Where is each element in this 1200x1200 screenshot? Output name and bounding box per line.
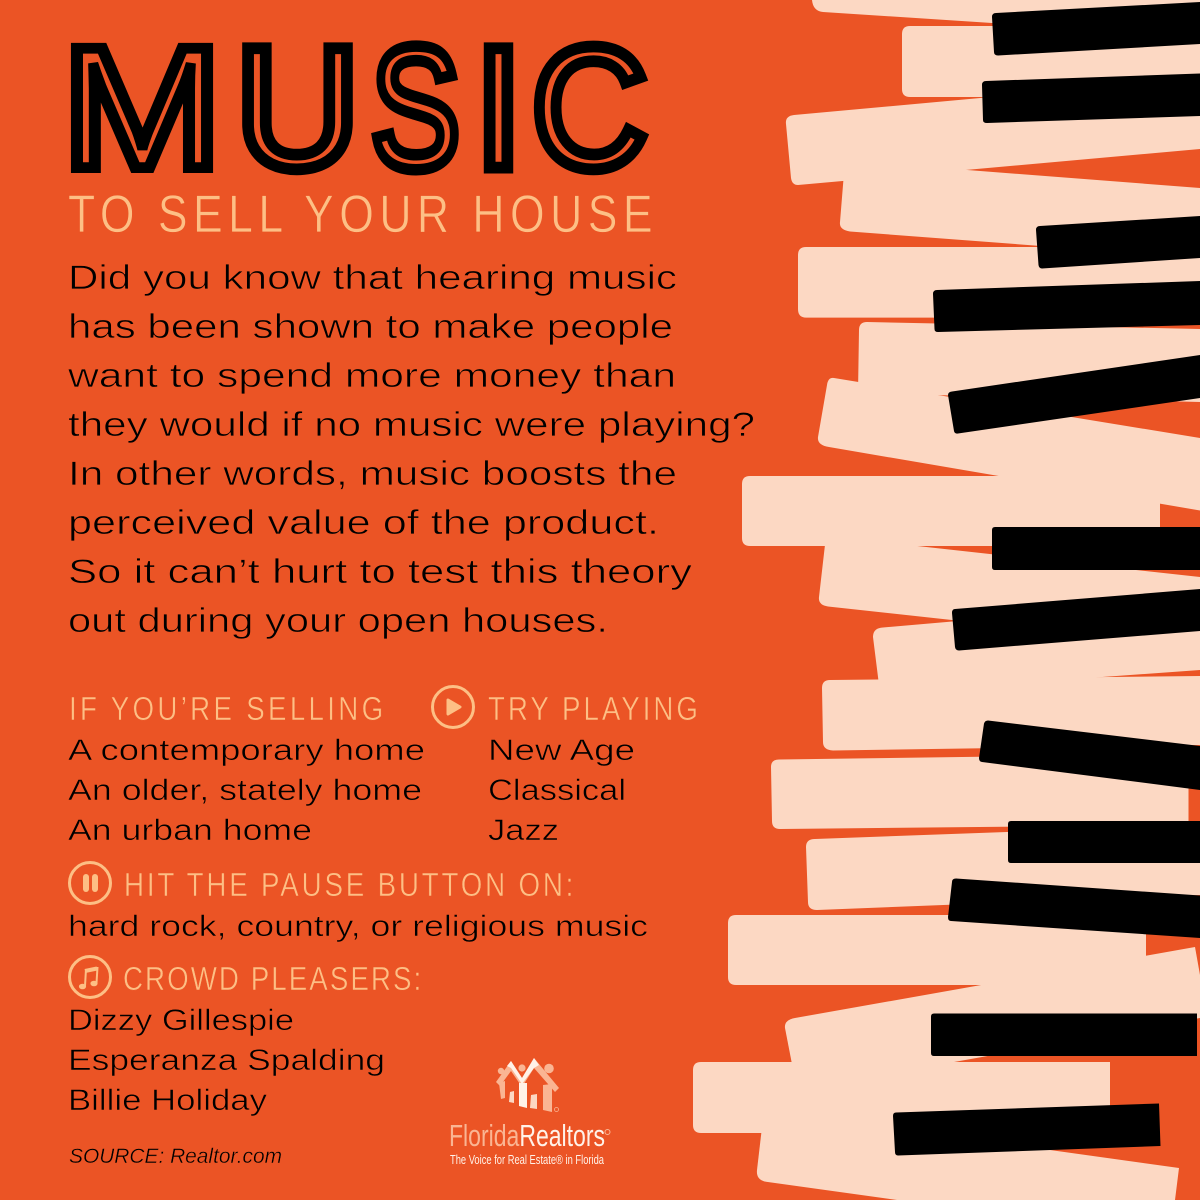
intro paragraph: has been shown to make people	[68, 308, 673, 346]
title: MUSIC: S	[372, 13, 459, 204]
panel: try playing	[432, 686, 698, 847]
registered mark	[605, 1130, 610, 1134]
list: music genres: New Age	[488, 734, 635, 767]
intro paragraph: Did you know that hearing music	[68, 259, 677, 297]
intro paragraph: out during your open houses.	[68, 602, 608, 640]
title: MUSIC: M	[62, 13, 222, 204]
intro paragraph: they would if no music were playing?	[68, 406, 755, 444]
list: artists	[68, 1004, 385, 1117]
panel: pause	[68, 862, 648, 943]
list: music genres: Classical	[488, 774, 626, 807]
ivory keys	[693, 0, 1200, 1200]
tagline: The Voice for Real Estate® in Florida	[450, 1153, 604, 1167]
source note: SOURCE: Realtor.com	[69, 1145, 282, 1168]
list: home types	[68, 734, 425, 847]
list: music genres: Jazz	[488, 814, 559, 847]
black keys	[893, 2, 1200, 1156]
intro paragraph	[67, 259, 755, 640]
title: MUSIC: C	[532, 12, 647, 203]
panel: crowd pleasers	[68, 956, 421, 1117]
intro paragraph: So it can’t hurt to test this theory	[68, 553, 692, 591]
list: artists: Esperanza Spalding	[68, 1044, 385, 1077]
heading: crowd pleasers: CROWD PLEASERS:	[123, 961, 421, 998]
heading: hit the pause button on: HIT THE PAUSE BUTTON ON:	[124, 867, 573, 904]
title: MUSIC: I	[475, 13, 522, 204]
panel: if you're selling	[68, 691, 425, 847]
heading: if you're selling: IF YOU’RE SELLING	[69, 691, 383, 728]
list: artists: Dizzy Gillespie	[68, 1004, 294, 1037]
subtitle: TO SELL YOUR HOUSE	[68, 185, 653, 244]
intro paragraph: want to spend more money than	[67, 357, 676, 395]
list: artists: Billie Holiday	[68, 1084, 267, 1117]
icon: houses and people	[496, 1058, 559, 1112]
icon: pause button	[70, 862, 110, 904]
intro paragraph: In other words, music boosts the	[68, 455, 677, 493]
list: home types: An older, stately home	[68, 774, 422, 807]
list: home types: An urban home	[68, 814, 312, 847]
intro paragraph: perceived value of the product.	[68, 504, 659, 542]
logo: Florida Realtors	[449, 1058, 610, 1167]
wordmark: FloridaRealtors	[449, 1118, 605, 1153]
title: MUSIC	[62, 12, 647, 204]
illustration: piano keys	[693, 0, 1200, 1200]
heading: try playing: TRY PLAYING	[488, 691, 698, 728]
title: MUSIC: U	[236, 13, 359, 204]
text: genres to avoid: hard rock, country, or religious music	[68, 910, 648, 943]
icon: play button	[432, 686, 474, 728]
title: MUSIC: I	[475, 13, 522, 204]
list: music genres	[488, 734, 635, 847]
title: MUSIC: M	[62, 13, 222, 204]
title: MUSIC: S	[372, 13, 459, 204]
title: MUSIC: U	[236, 13, 359, 204]
title: MUSIC: C	[532, 12, 647, 203]
list: home types: A contemporary home	[68, 734, 425, 767]
icon: music note	[70, 956, 110, 998]
